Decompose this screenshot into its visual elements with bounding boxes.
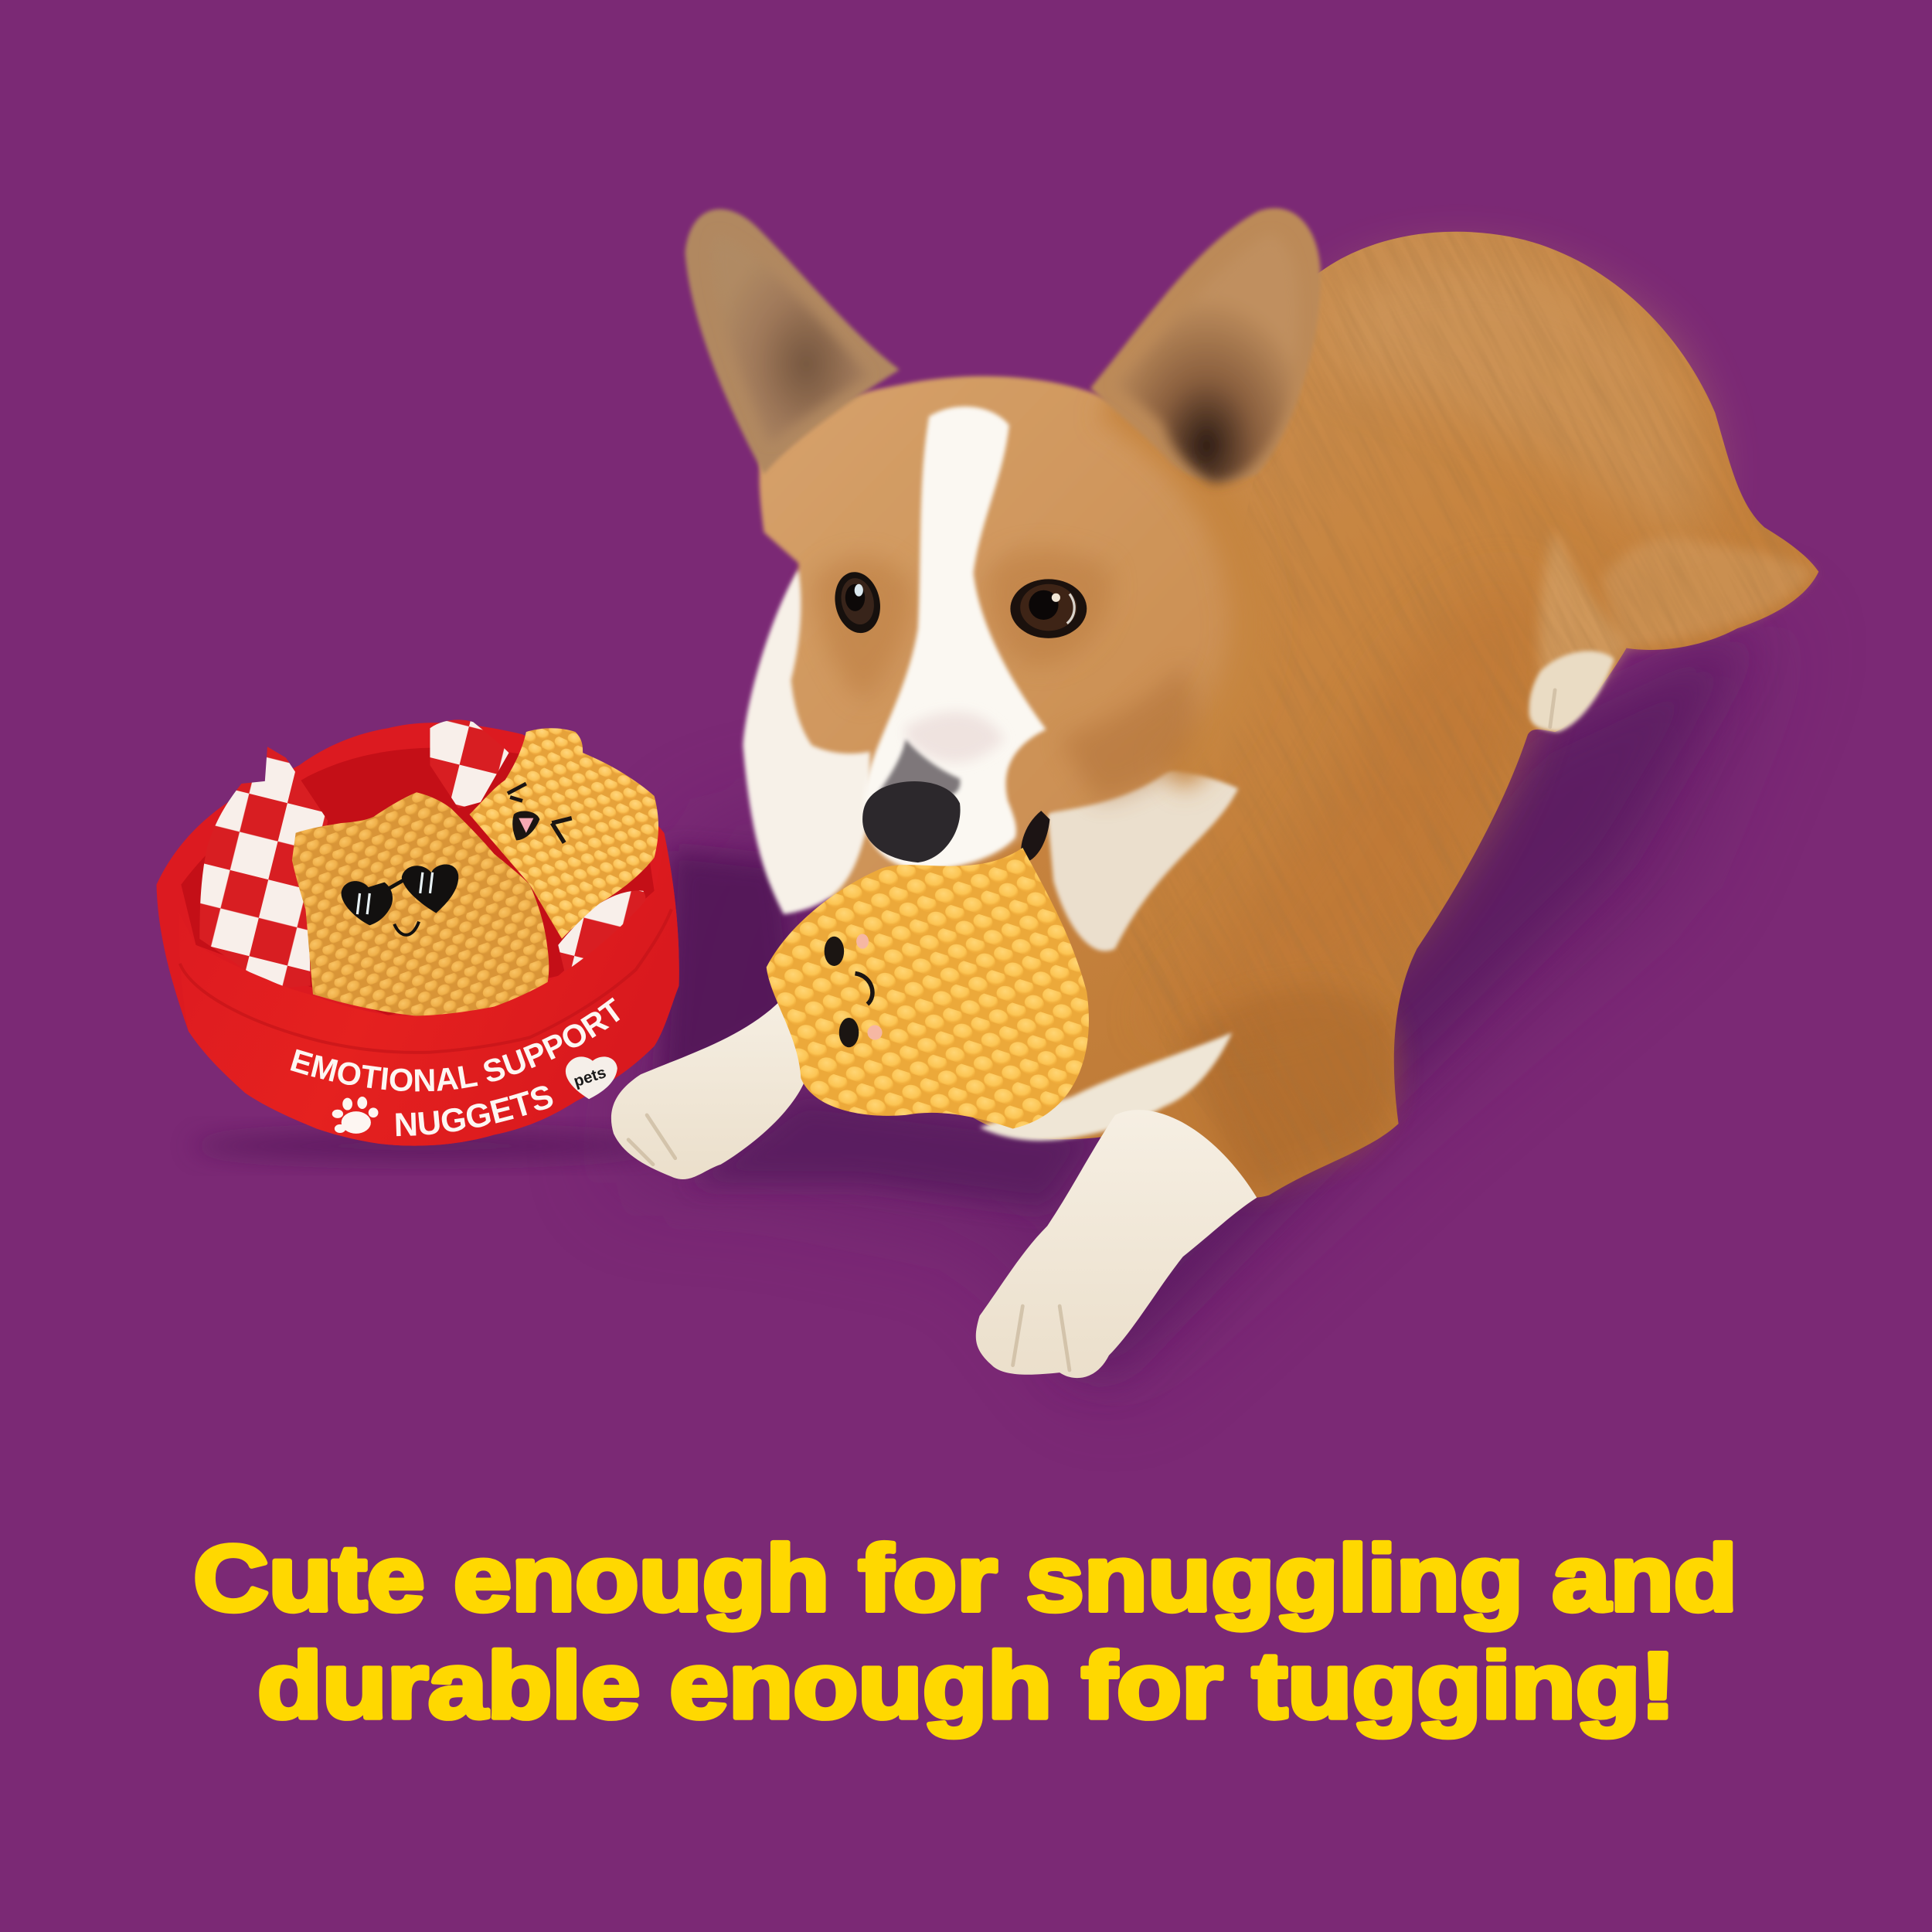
lower chest white [980,1032,1232,1141]
dog body [892,232,1818,1198]
right eye [1010,579,1087,638]
bowl nuggets text: NUGGETS [396,1086,553,1136]
corgi dog [157,206,1819,1740]
nugget face [825,934,883,1047]
right ear inner [1115,234,1298,483]
pets heart logo: pets [571,1063,608,1090]
back nugget [469,728,658,939]
chest white fur [1047,770,1238,951]
back nugget face [508,784,572,843]
heart sunglasses [342,864,458,925]
paw print icon [332,1097,378,1134]
left front leg [611,992,808,1179]
dog head [750,376,1252,898]
nose bridge shading [906,712,1004,763]
right ear [1090,208,1321,481]
checkered cloth left [199,747,328,988]
white blaze and muzzle [863,406,1046,870]
headline [193,1526,1737,1738]
headline: durable enough for tugging! [257,1633,1675,1738]
nugget smile [394,922,419,935]
front nugget [292,792,549,1016]
emotional support nuggets bowl [156,719,679,1146]
left ear [685,209,900,474]
left eye [829,568,886,638]
headline: Cute enough for snuggling and [193,1526,1737,1631]
checkered cloth right [558,890,645,976]
infographic scene [156,206,1819,1740]
body shading [1146,258,1814,1192]
pets heart logo [566,1056,617,1099]
paw toe lines [628,690,1555,1370]
mouth [1021,811,1049,862]
bowl rim seam [180,910,672,1053]
dog and bowl shadows [191,616,1787,1393]
fur texture [1145,236,1772,1003]
left ear inner [713,234,869,444]
bowl back wall [156,723,679,1146]
right front leg [976,1110,1257,1378]
plush nugget in mouth [767,848,1089,1128]
bowl label text: EMOTIONAL SUPPORT [291,997,620,1091]
dog nose [862,740,961,862]
eye shading [813,549,1111,702]
bowl inner [181,747,655,1015]
left white cheek [743,570,870,914]
head to body blend [1109,400,1251,774]
cheek shadows [1060,665,1196,801]
hind paw [1529,651,1614,732]
bowl front wall [179,833,679,1146]
checkered cloth top [430,719,509,808]
